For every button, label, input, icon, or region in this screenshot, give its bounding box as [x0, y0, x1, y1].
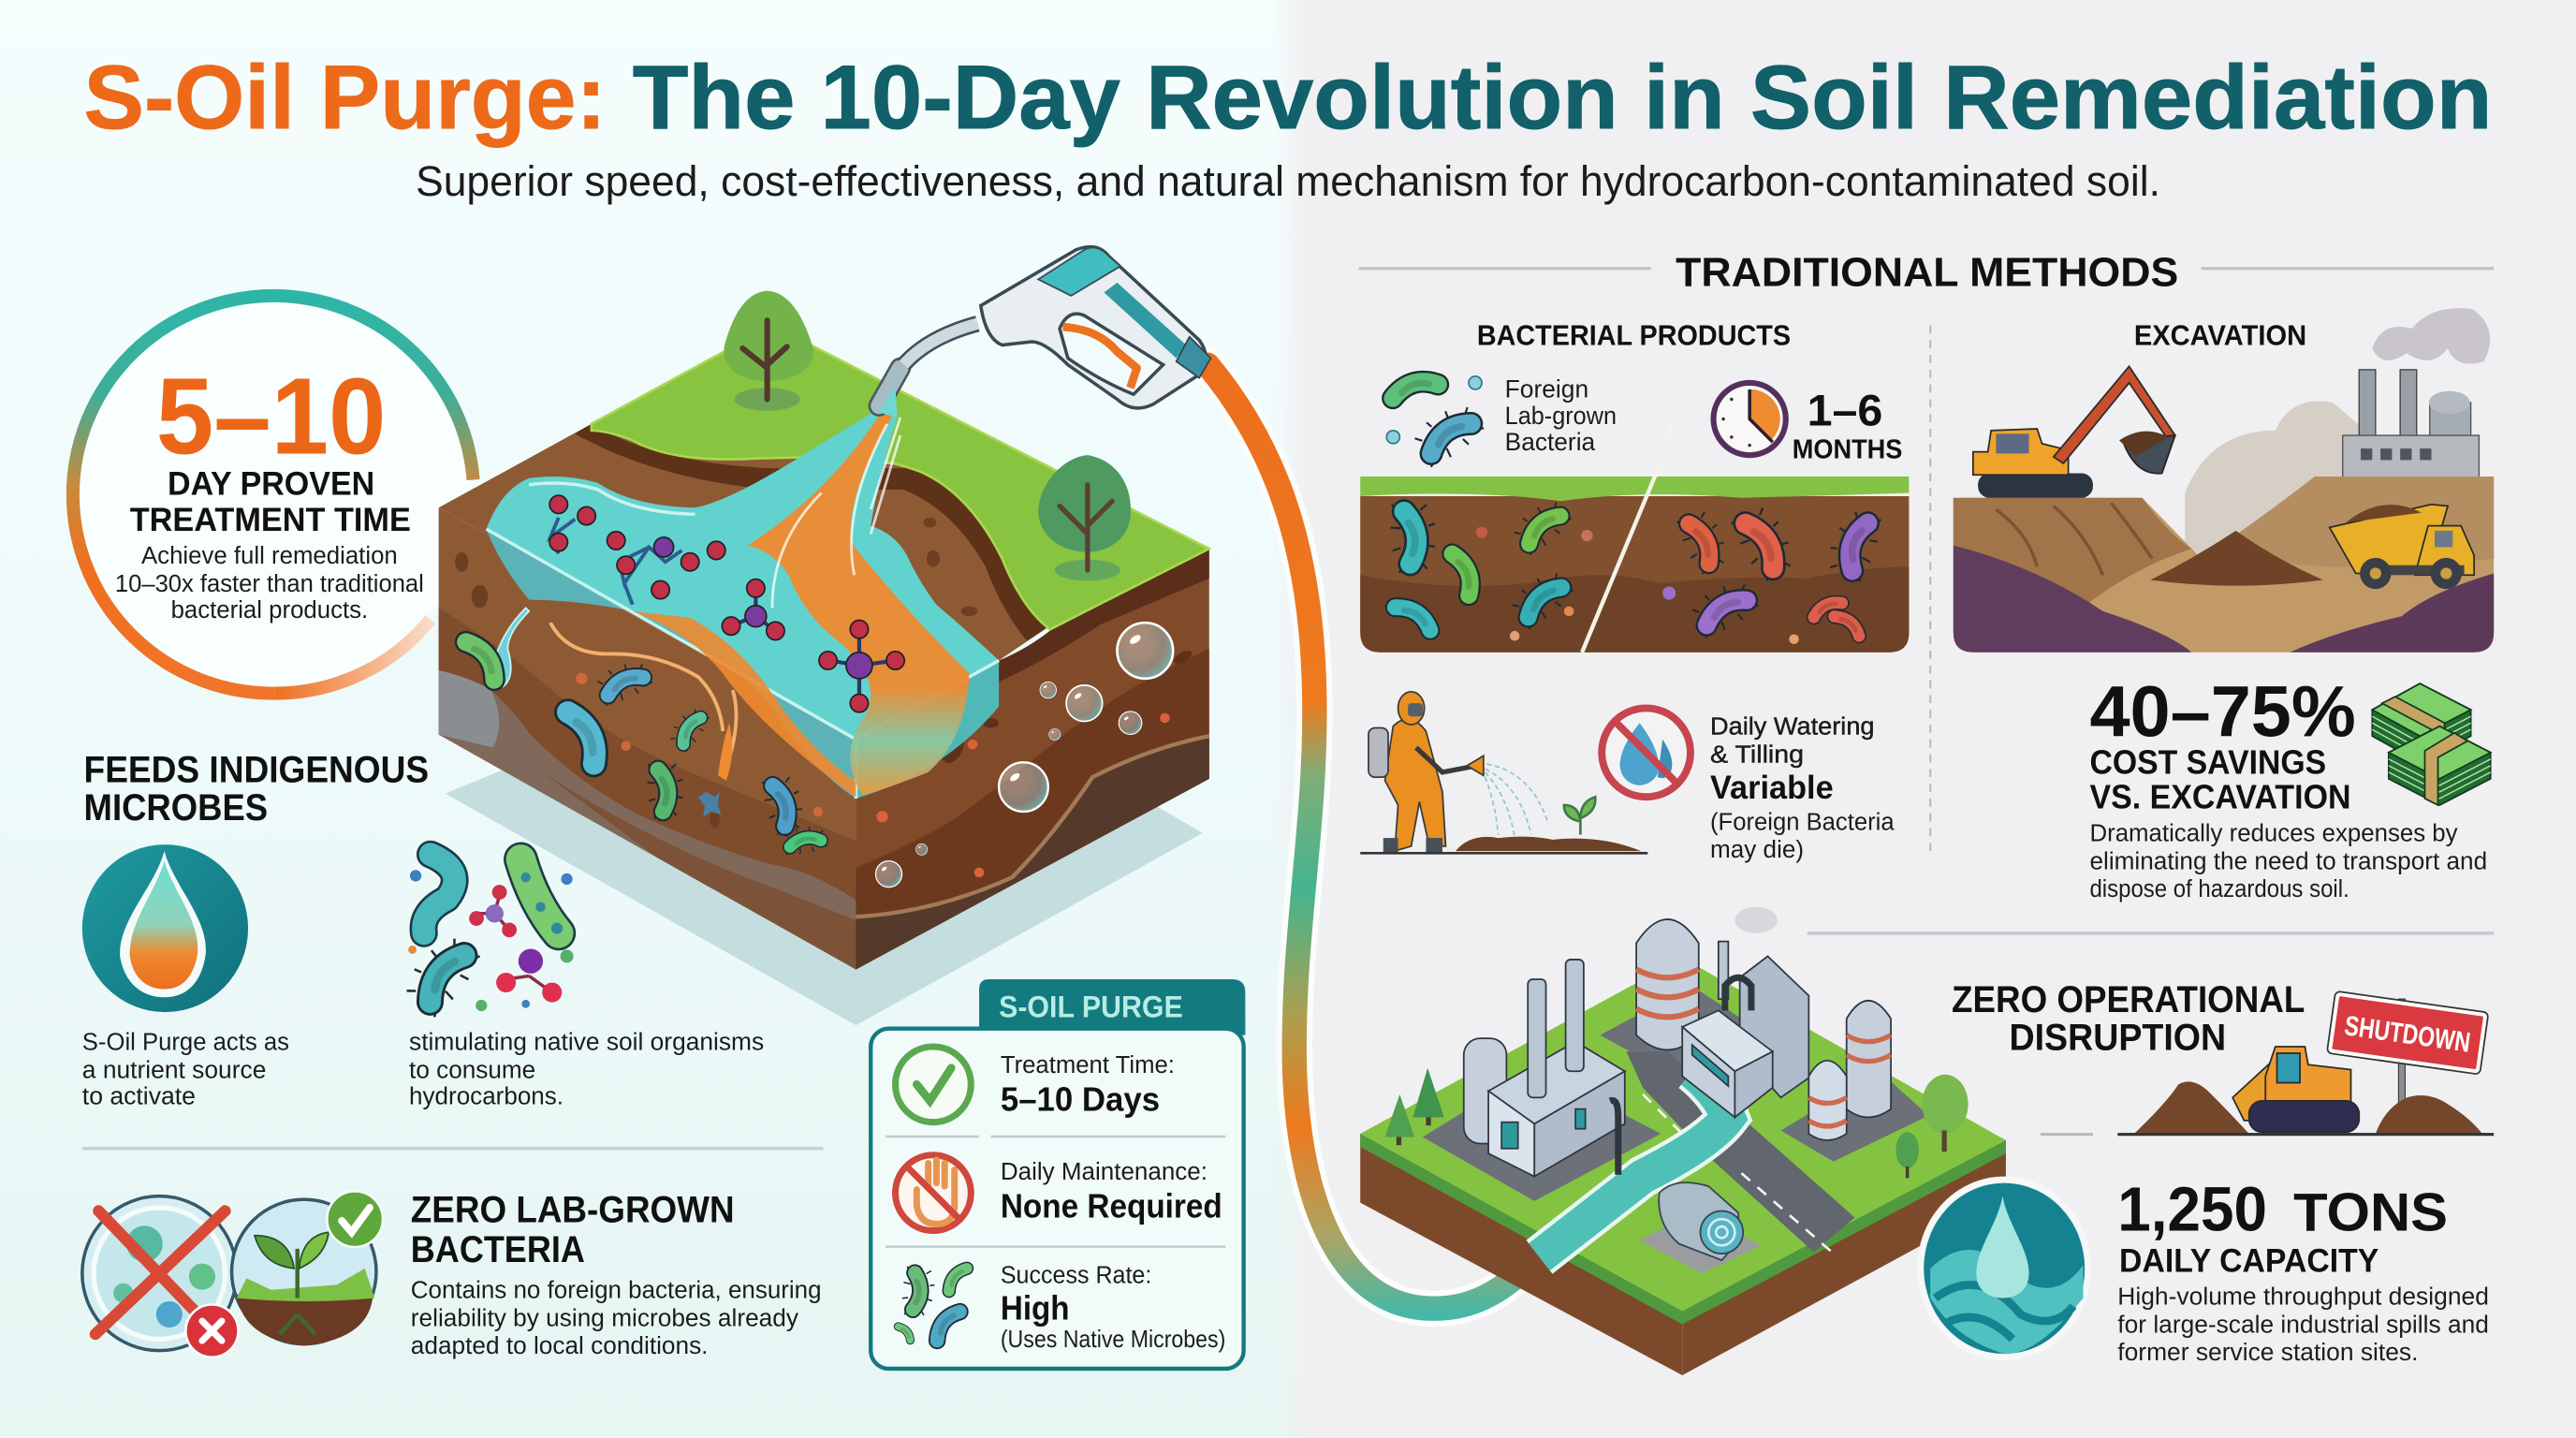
text: nutrient source	[82, 1027, 289, 1109]
orange oil flows	[550, 411, 970, 797]
stat: daily capacity: High-volume throughput designed	[2117, 1282, 2489, 1310]
section heading: feeds indigenous microbes	[84, 749, 429, 829]
row: treatment time: 5–10 Days	[1001, 1079, 1160, 1118]
description: Achieve full remediation	[141, 541, 398, 569]
ground shadow	[446, 707, 1203, 1025]
row: daily maintenance: Daily Maintenance:	[1001, 1157, 1208, 1185]
hose	[1208, 365, 1560, 1309]
icon: foreign bacteria	[1386, 376, 1486, 470]
tree: rear	[724, 291, 813, 411]
text: nutrient source: a nutrient source	[82, 1055, 266, 1083]
water spray	[1486, 764, 1547, 838]
row: success rate: High	[1001, 1288, 1070, 1327]
grass surface	[592, 325, 1209, 629]
soil and sprout	[1456, 837, 1641, 851]
stat: cost savings: eliminating the need to transport and	[2089, 846, 2487, 874]
title: The 10-Day Revolution in Soil Remediation	[633, 48, 2492, 148]
text: daily watering and tilling: Daily Watering	[1710, 712, 1875, 740]
left building	[1464, 960, 1625, 1177]
illustration: industrial plant block	[1360, 907, 2006, 1375]
stat: 1-6 months	[1793, 387, 1902, 465]
stat: cost savings: COST SAVINGS	[2089, 743, 2326, 782]
text: foreign lab-grown bacteria: Bacteria	[1505, 427, 1596, 456]
top soil surface	[439, 424, 1050, 740]
tree: right	[1038, 455, 1131, 580]
description: 10–30x faster than traditional	[115, 569, 424, 597]
row: success rate	[898, 1261, 1225, 1353]
stat: daily capacity: for large-scale industrial spills and	[2117, 1310, 2489, 1338]
text: daily watering and tilling: Variable	[1710, 770, 1834, 806]
treated water channel	[1540, 1071, 1728, 1257]
worker	[1385, 719, 1445, 851]
bacteria: native	[1388, 494, 1593, 640]
stat: daily capacity: TONS	[2293, 1183, 2448, 1243]
text: zero lab-grown bacteria	[411, 1190, 822, 1359]
bacteria: dying	[1662, 502, 1885, 644]
left soil face	[439, 507, 856, 969]
stat: 1-6 months: 1–6	[1808, 387, 1882, 436]
text: foreign lab-grown bacteria	[1505, 374, 1617, 456]
panel: S-Oil Purge summary card	[871, 979, 1245, 1369]
label: TREATMENT TIME	[130, 502, 411, 538]
icon: shutdown sign and excavator	[2041, 991, 2494, 1136]
text: foreign lab-grown bacteria: Lab-grown	[1505, 401, 1617, 430]
callout: 5-10 day treatment time ring	[73, 296, 474, 694]
green surface	[1360, 958, 2006, 1312]
text: zero lab-grown bacteria: BACTERIA	[411, 1229, 585, 1270]
progress ring	[73, 296, 474, 694]
text: nutrient source: S-Oil Purge acts as	[82, 1027, 289, 1055]
illustration: soil cross-section block	[439, 291, 1209, 1025]
card body	[871, 1029, 1244, 1369]
icon: healthy plant	[232, 1191, 383, 1345]
row: treatment time: Treatment Time:	[1001, 1050, 1175, 1078]
text: nutrient source: to activate	[82, 1081, 196, 1109]
panel: S-Oil Purge summary card: S-OIL PURGE	[999, 990, 1183, 1023]
text: stimulating native organisms	[409, 1027, 764, 1109]
bubbles	[875, 623, 1173, 888]
row: success rate: Success Rate:	[1001, 1261, 1151, 1289]
text: zero lab-grown bacteria: adapted to local conditions.	[411, 1331, 708, 1359]
right tanks	[1808, 1001, 1891, 1140]
text: daily watering and tilling: (Foreign Bacteria	[1710, 807, 1895, 835]
card tab	[979, 979, 1245, 1035]
stat: cost savings: VS. EXCAVATION	[2089, 777, 2351, 815]
section heading: feeds indigenous microbes: MICROBES	[84, 787, 268, 829]
small excavator	[2232, 1047, 2359, 1132]
soil faces	[1360, 1134, 1682, 1375]
row: treatment time	[896, 1047, 1175, 1123]
text: zero lab-grown bacteria: reliability by using microbes already	[411, 1303, 799, 1331]
label: DAY PROVEN	[168, 465, 374, 502]
stat: daily capacity: former service station sites.	[2117, 1338, 2418, 1366]
subheading: excavation: EXCAVATION	[2134, 319, 2306, 352]
liquid slab	[487, 411, 999, 799]
excavator	[1973, 366, 2175, 498]
label	[130, 465, 411, 538]
tall tower	[1636, 907, 1778, 1049]
stat: cost savings	[2089, 671, 2487, 902]
stat: cost savings: Dramatically reduces expenses by	[2089, 819, 2458, 847]
text: zero lab-grown bacteria: Contains no foreign bacteria, ensuring	[411, 1275, 822, 1303]
icon: no lab bacteria petri dish	[82, 1196, 239, 1357]
description: bacterial products.	[171, 595, 368, 624]
stat: 1-6 months: MONTHS	[1793, 435, 1902, 465]
molecules	[549, 495, 904, 712]
icon: no water droplets	[1602, 708, 1690, 797]
earthworks	[1954, 477, 2494, 653]
paved pads	[1423, 1068, 1661, 1201]
big number: 5–10	[156, 355, 386, 477]
stat: daily capacity: DAILY CAPACITY	[2119, 1242, 2378, 1279]
text: daily watering and tilling: may die)	[1710, 835, 1804, 863]
bacteria in soil	[466, 637, 827, 857]
stat: cost savings: dispose of hazardous soil.	[2089, 874, 2349, 902]
road	[1627, 1051, 1854, 1252]
sign board: SHUTDOWN	[2343, 1010, 2472, 1059]
heading: zero operational disruption	[1952, 979, 2305, 1058]
icon: clock	[1714, 383, 1786, 455]
icon: water capacity badge	[1917, 1177, 2091, 1360]
icon: money stacks	[2372, 683, 2491, 805]
trees	[1385, 1068, 1969, 1178]
icon: nutrient drop	[82, 844, 248, 1012]
icon: native microbes cluster	[399, 855, 574, 1020]
text: zero lab-grown bacteria: ZERO LAB-GROWN	[411, 1190, 735, 1231]
smoke	[2372, 308, 2490, 364]
signpost	[2398, 999, 2405, 1134]
heading: traditional methods: TRADITIONAL METHODS	[1676, 249, 2178, 295]
icon: spray gun	[879, 247, 1211, 418]
subtitle: Superior speed, cost-effectiveness, and natural mechanism for hydrocarbon-contaminated soil.	[416, 157, 2160, 205]
panel: excavation site illustration	[1954, 308, 2494, 653]
text: foreign lab-grown bacteria: Foreign	[1505, 374, 1588, 404]
text: stimulating native organisms: hydrocarbons.	[409, 1081, 564, 1109]
center buildings	[1682, 956, 1808, 1117]
title: S-Oil Purge:	[84, 48, 607, 148]
sign board	[2327, 991, 2488, 1075]
dump truck	[2330, 505, 2474, 589]
text: daily watering and tilling	[1710, 712, 1895, 863]
stat: cost savings: 40–75%	[2089, 671, 2356, 752]
stat: daily capacity	[2117, 1176, 2489, 1366]
diagonal split	[1582, 420, 1673, 653]
row: success rate: (Uses Native Microbes)	[1001, 1327, 1225, 1353]
panel: soil with bacteria comparison	[1360, 420, 1909, 653]
text: stimulating native organisms: stimulating native soil organisms	[409, 1027, 764, 1055]
factory	[2343, 370, 2479, 478]
section heading: feeds indigenous microbes: FEEDS INDIGENOUS	[84, 749, 429, 790]
turbine pump	[1640, 1182, 1761, 1273]
right soil face	[856, 549, 1209, 969]
heading: zero operational disruption: ZERO OPERATIONAL	[1952, 979, 2305, 1020]
row: daily maintenance	[896, 1155, 1222, 1231]
row: daily maintenance: None Required	[1001, 1186, 1222, 1225]
soil mounds	[2134, 1081, 2249, 1134]
heading: zero operational disruption: DISRUPTION	[2009, 1017, 2226, 1058]
subheading: bacterial products: BACTERIAL PRODUCTS	[1477, 319, 1791, 352]
text: daily watering and tilling: & Tilling	[1710, 740, 1804, 768]
text: stimulating native organisms: to consume	[409, 1055, 535, 1083]
stat: daily capacity: 1,250	[2117, 1176, 2267, 1245]
icon: hazmat worker spraying	[1360, 692, 1647, 855]
description	[115, 541, 424, 624]
